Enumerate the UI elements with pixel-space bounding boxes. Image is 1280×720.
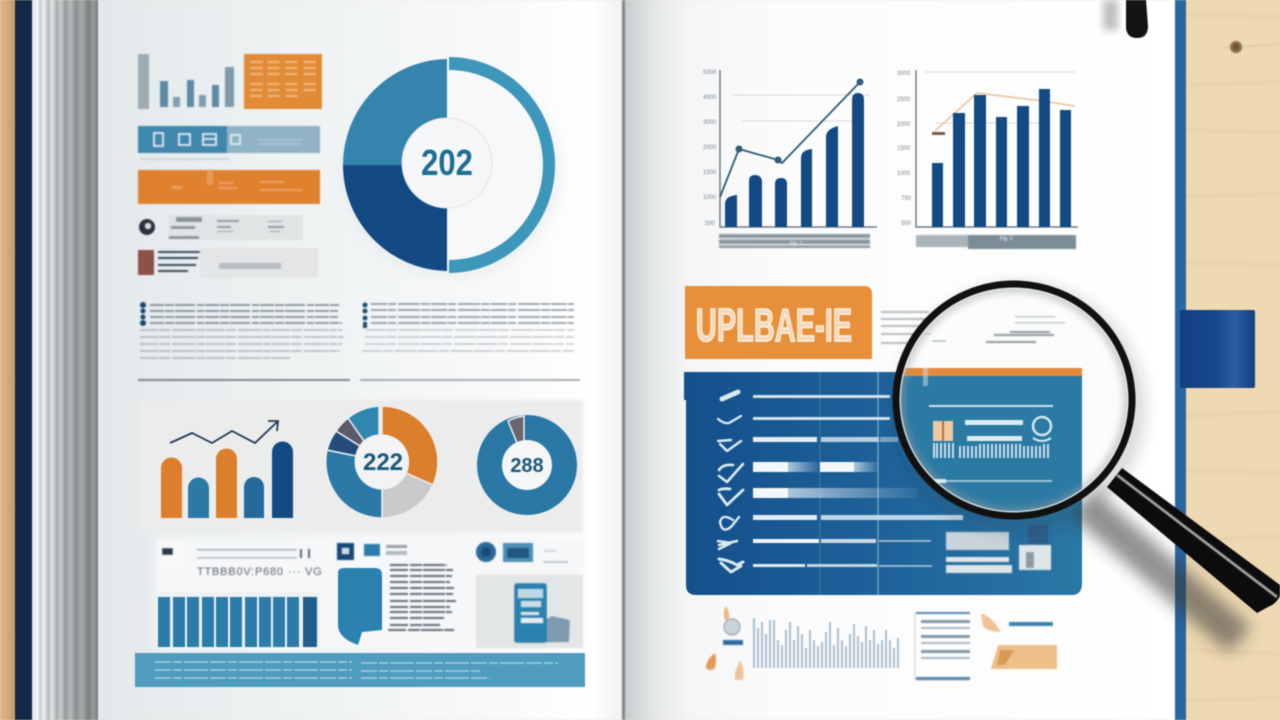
right page right chart: 1000 bbox=[897, 171, 911, 177]
lens contents bbox=[898, 290, 1128, 514]
book spine bbox=[15, 0, 33, 720]
intro text lines bbox=[881, 311, 929, 344]
right chart caption bbox=[916, 235, 1076, 249]
rounded bar chart with trend arrow bbox=[161, 421, 293, 518]
panel thumbnail blocks bbox=[946, 525, 1051, 573]
orange text band bbox=[138, 170, 320, 204]
right page right chart: 2000 bbox=[897, 122, 911, 128]
right page right chart: 750 bbox=[901, 196, 912, 202]
lower left white panels bbox=[155, 537, 585, 649]
blue icon band bbox=[138, 126, 320, 160]
pen shadow bbox=[1103, 0, 1118, 30]
magnifier shadow bbox=[904, 292, 1240, 640]
brown swatch row bbox=[138, 248, 318, 278]
right page right chart: 2500 bbox=[897, 97, 911, 103]
donut chart 222 bbox=[326, 406, 438, 518]
left chart caption bbox=[719, 234, 870, 248]
lower charts panel bbox=[140, 400, 583, 533]
right chart caption: Fig. 2 bbox=[1000, 236, 1013, 242]
handle bbox=[1107, 468, 1280, 613]
donut label 222: 222 bbox=[363, 449, 403, 476]
page stack edge bbox=[32, 0, 99, 720]
title text: UPLBAE-IE bbox=[696, 300, 852, 352]
right page left chart bbox=[703, 70, 877, 227]
stat row bbox=[157, 540, 322, 578]
left chart caption: Fig. 1 bbox=[790, 241, 803, 247]
pie chart with centre label bbox=[343, 57, 560, 276]
checklist check icons bbox=[718, 392, 743, 572]
bottom mini infographics bbox=[706, 606, 744, 680]
right page left chart: 1500 bbox=[703, 170, 717, 176]
right page left chart: 500 bbox=[705, 221, 716, 227]
left page bbox=[98, 0, 624, 720]
icon row with text bbox=[139, 215, 303, 240]
right page bbox=[624, 0, 1176, 720]
orange title plate bbox=[685, 286, 872, 359]
checklist row bars bbox=[753, 395, 963, 567]
donut chart 288 bbox=[490, 416, 564, 502]
right page right chart: 1500 bbox=[897, 146, 911, 152]
pen tip at top bbox=[1126, 0, 1148, 38]
right page left chart: 4000 bbox=[703, 95, 717, 101]
donut label 288: 288 bbox=[510, 455, 544, 477]
lens rim bbox=[896, 284, 1132, 516]
right page left chart: 5000 bbox=[703, 70, 717, 76]
small icons middle column bbox=[337, 543, 407, 560]
pie centre year: 202 bbox=[421, 144, 473, 184]
left page text columns bbox=[138, 302, 580, 380]
orange mini graphics bbox=[981, 614, 1057, 669]
magnifying glass bbox=[895, 280, 1280, 613]
bookmark tab bbox=[1180, 310, 1255, 388]
blue callout shape bbox=[338, 568, 382, 645]
right page right chart: 500 bbox=[901, 221, 912, 227]
barcode bar chart bbox=[754, 618, 898, 668]
book gutter bbox=[622, 0, 625, 720]
teal footer band bbox=[135, 653, 585, 687]
orange table card bbox=[244, 54, 322, 109]
right page left chart: 1000 bbox=[703, 195, 717, 201]
icons right column bbox=[476, 542, 568, 563]
blue book cover edge bbox=[1175, 0, 1186, 720]
right page left chart: 2000 bbox=[703, 145, 717, 151]
right page right chart bbox=[897, 70, 1078, 227]
left page top mini charts bbox=[138, 54, 234, 109]
small list table bbox=[915, 612, 970, 680]
blue bar strip bbox=[155, 592, 320, 648]
phone illustration card bbox=[476, 575, 583, 648]
right page left chart: 3000 bbox=[703, 120, 717, 126]
text column bbox=[388, 565, 456, 630]
wood knot bbox=[1222, 41, 1280, 53]
stat row: TTBBB0V:P680 ··· VG bbox=[197, 566, 322, 578]
right page right chart: 3000 bbox=[897, 71, 911, 77]
blue checklist panel bbox=[684, 372, 1082, 595]
